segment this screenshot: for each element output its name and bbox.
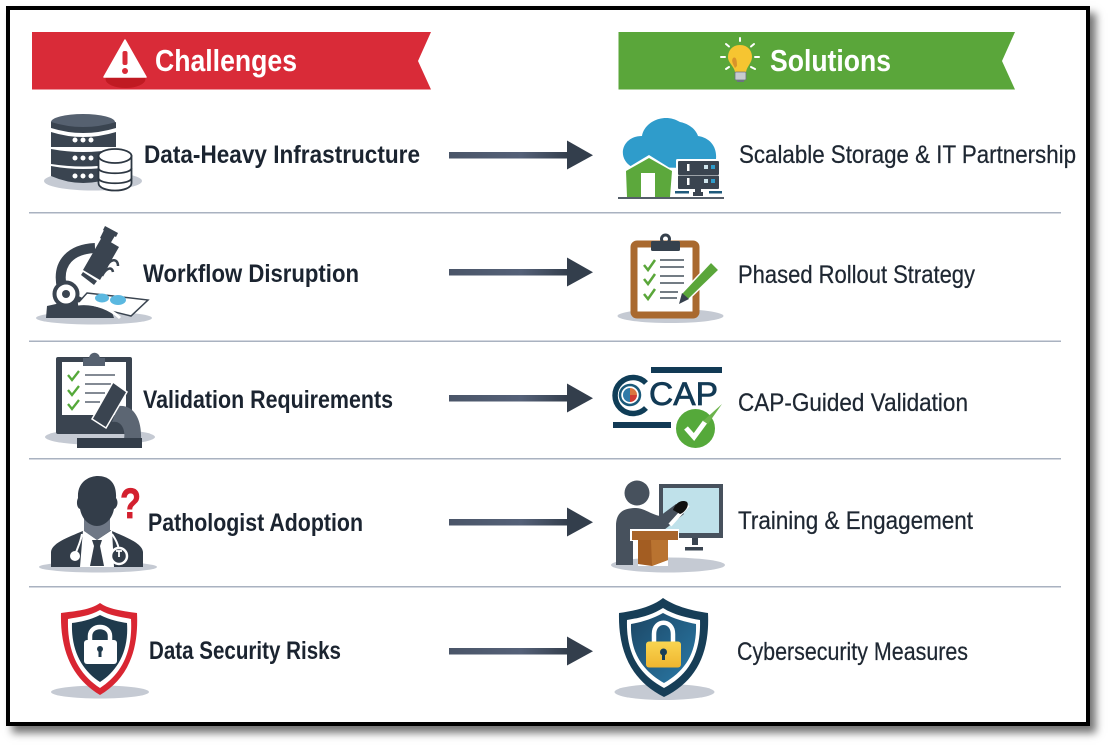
row 1 solution: Scalable Storage & IT Partnership (618, 118, 1076, 199)
row 3 arrow (449, 384, 593, 412)
row 5 challenge: Data Security Risks: Data Security Risks (149, 637, 341, 665)
row 2 solution: Phased Rollout Strategy: Phased Rollout Strategy (738, 261, 975, 289)
row 5 arrow (449, 636, 593, 666)
row 1 solution: Scalable Storage & IT Partnership: Scalable Storage & IT Partnership (739, 141, 1076, 169)
icon: blue shield with padlock (614, 598, 714, 700)
icon: microscope with slide (36, 226, 152, 324)
icon: trainer at monitor (611, 480, 725, 572)
heading: Solutions banner: Solutions (770, 43, 891, 78)
icon: CAP logo with check: CAP (649, 376, 718, 412)
row 3 challenge: Validation Requirements (45, 353, 393, 448)
row 3 solution: CAP-Guided Validation (613, 367, 968, 448)
row 3 solution: CAP-Guided Validation: CAP-Guided Validation (738, 389, 968, 417)
row 5 challenge: Data Security Risks (51, 603, 341, 698)
icon: cloud, building and server (618, 118, 724, 199)
row 5 solution: Cybersecurity Measures: Cybersecurity Measures (737, 638, 968, 666)
row 2 challenge: Workflow Disruption: Workflow Disruption (143, 260, 359, 288)
row 2 solution: Phased Rollout Strategy (618, 235, 975, 323)
icon: clipboard with microscope (45, 353, 155, 448)
row 4 solution: Training & Engagement: Training & Engagement (738, 507, 973, 535)
heading: Challenges banner (32, 32, 431, 90)
row 4 challenge: Pathologist Adoption (39, 476, 363, 572)
row 2 arrow (449, 258, 593, 286)
icon: red shield with padlock (51, 603, 149, 698)
row 4 challenge: Pathologist Adoption: Pathologist Adoption (148, 509, 363, 537)
row 1 challenge: Data-Heavy Infrastructure (44, 114, 420, 190)
icon: clipboard with pencil (618, 235, 724, 323)
dividers (29, 212, 1061, 588)
row 5 solution: Cybersecurity Measures (614, 598, 968, 700)
row 4 arrow (449, 508, 593, 536)
row 1 arrow (449, 140, 593, 170)
icon: pathologist with question mark (39, 476, 157, 572)
heading: Solutions banner (618, 32, 1015, 90)
row 2 challenge: Workflow Disruption (36, 226, 359, 324)
icon: pathologist with question mark: ? (120, 480, 141, 528)
heading: Challenges banner: Challenges (155, 43, 297, 78)
row 1 challenge: Data-Heavy Infrastructure: Data-Heavy Infrastructure (144, 141, 420, 169)
row 3 challenge: Validation Requirements: Validation Requirements (143, 386, 393, 414)
icon: database servers (44, 114, 142, 190)
row 4 solution: Training & Engagement (611, 480, 973, 572)
icon: CAP logo with check (613, 367, 722, 448)
